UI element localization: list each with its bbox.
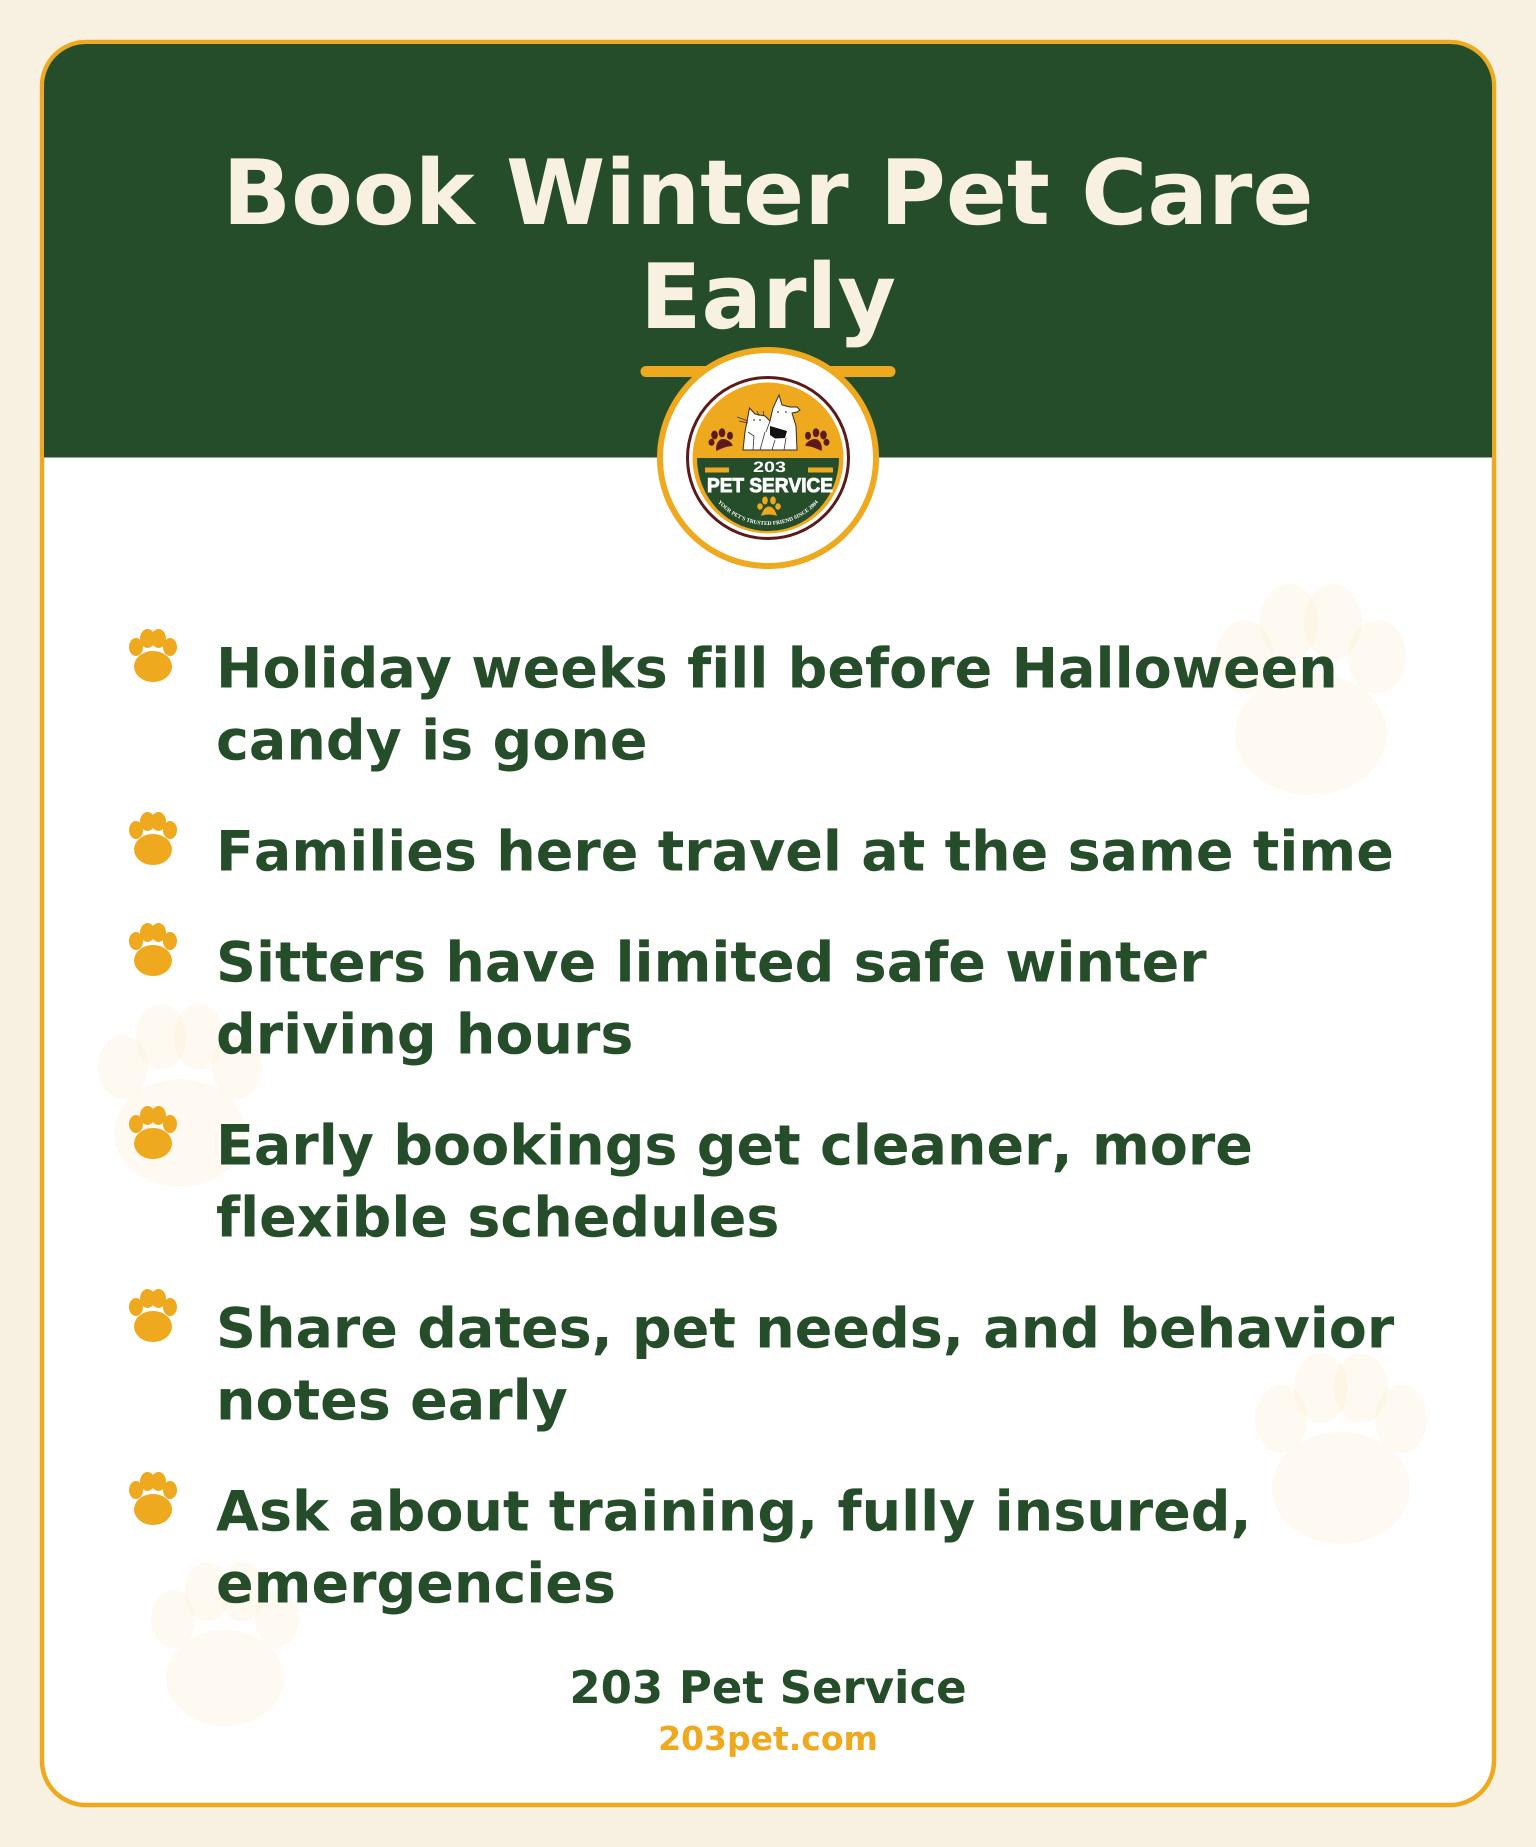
bullet text [216,636,1338,774]
bullet text: Holiday weeks fill before Halloween [216,636,1338,702]
logo: left paw [708,428,733,451]
logo: cat and dog [737,395,800,450]
bullet icon: paw [129,1289,177,1342]
logo: orange bars [705,468,833,472]
logo: right paw [805,428,830,451]
bullet text: Share dates, pet needs, and behavior [216,1296,1395,1362]
bullet text: candy is gone [216,708,647,774]
bullet text: Early bookings get cleaner, more [216,1114,1253,1178]
logo: small paw [757,496,781,516]
watermark paw: middle left [98,1004,262,1187]
bullet icon: paw [129,1472,177,1525]
logo: arc tagline: YOUR PET'S TRUSTED FRIEND SINCE 2004 [718,500,818,525]
bullet text [216,1480,1252,1616]
bullet icon: paw [129,812,177,865]
bullet text: flexible schedules [216,1186,779,1250]
bullet 5 [129,1289,1395,1434]
bullet icon: paw [129,1106,177,1159]
bullet text [216,1114,1253,1250]
footer brand name: 203 Pet Service [569,1661,967,1714]
title: Book Winter Pet Care [222,141,1314,246]
logo badge [657,347,879,569]
bullet text: Ask about training, fully insured, [216,1480,1252,1544]
header band [44,44,1492,458]
title underline [640,366,896,377]
watermark paw: bottom left [151,1562,299,1726]
logo: pet service: PET SERVICE [707,475,833,497]
bullet text: notes early [216,1368,568,1434]
title [222,141,1314,350]
watermark paw: top right [1216,584,1406,795]
bullet 2 [129,812,1394,884]
bullet 6 [129,1472,1252,1616]
bullet 4 [129,1106,1253,1250]
bullet text [216,1296,1395,1434]
logo: 203: 203 [753,459,786,476]
bullet icon: paw [129,629,177,682]
watermark paw: lower right [1255,1353,1427,1544]
bullet icon: paw [129,923,177,976]
bullet 1 [129,629,1338,774]
bullet text: Families here travel at the same time [216,820,1394,884]
bullet text: driving hours [216,1002,633,1068]
bullet text [216,930,1207,1068]
bullet text: emergencies [216,1552,616,1616]
bullet text: Sitters have limited safe winter [216,930,1207,996]
bullet 3 [129,923,1207,1068]
title: Early [640,245,896,350]
footer url: 203pet.com [658,1719,878,1758]
